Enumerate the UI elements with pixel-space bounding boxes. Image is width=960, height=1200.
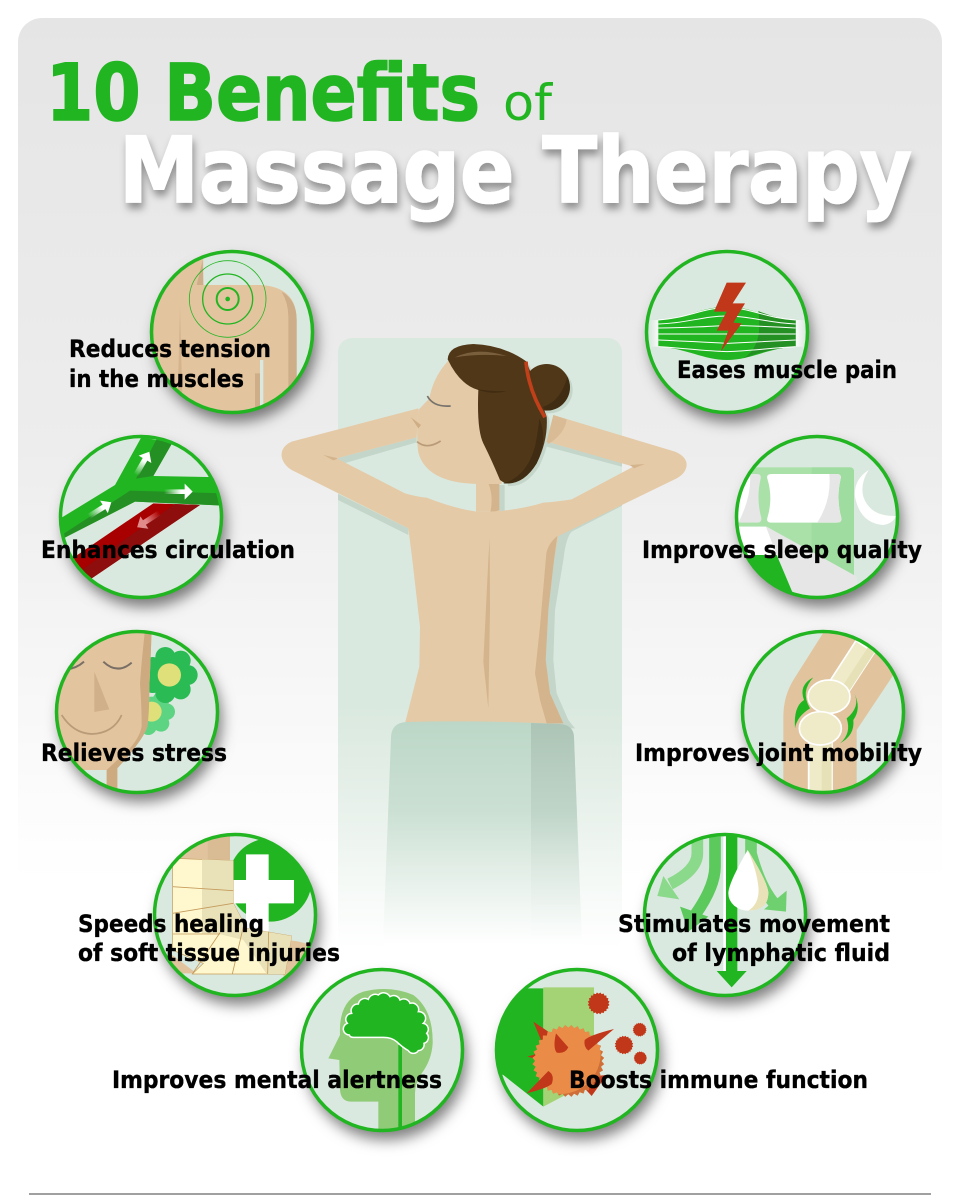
- ring: [736, 436, 898, 598]
- circle base: [151, 251, 313, 413]
- ring: [154, 834, 316, 996]
- background card: [18, 18, 942, 880]
- label: Speeds healing: [78, 910, 264, 938]
- benefit: stimulates lymphatic fluid: [618, 833, 890, 996]
- circle base: [60, 436, 222, 598]
- icon: head with brain: [328, 989, 433, 1133]
- benefit: boosts immune function: [490, 969, 868, 1131]
- label: of lymphatic fluid: [672, 939, 890, 967]
- circle base: [646, 251, 808, 413]
- icon: knee joint: [783, 630, 893, 797]
- figure: woman lying on mat: [282, 344, 687, 945]
- footer rule: [29, 1193, 931, 1195]
- label: Eases muscle pain: [677, 356, 897, 384]
- benefit: improves mental alertness: [112, 969, 463, 1133]
- icon: shoulder with target rings: [153, 258, 297, 411]
- title: [46, 49, 912, 224]
- massage mat: [338, 338, 622, 950]
- figure shadows on mat: [330, 364, 637, 728]
- back shading: [535, 536, 563, 723]
- body and arms: [282, 408, 687, 723]
- icon: shield and viruses: [490, 987, 647, 1107]
- title line one: 10 Benefits: [46, 49, 480, 139]
- label: [69, 335, 271, 393]
- label: Reduces tension: [69, 335, 271, 363]
- label: [78, 910, 340, 967]
- label: Stimulates movement: [618, 910, 890, 938]
- circle base: [742, 631, 904, 793]
- icon: muscle with lightning bolt: [650, 283, 806, 360]
- icon: bandage and medical cross: [170, 833, 317, 977]
- benefit: improves joint mobility: [635, 630, 922, 797]
- ring: [60, 436, 222, 598]
- ring: [56, 632, 218, 792]
- face: [411, 361, 502, 484]
- circle base: [301, 969, 463, 1131]
- label: [618, 910, 890, 967]
- label: in the muscles: [69, 365, 244, 393]
- ring: [644, 834, 806, 996]
- circle base: [56, 631, 218, 793]
- icon: relaxed face with flowers: [58, 633, 198, 788]
- icon: fluid drop and flow arrows: [657, 833, 787, 987]
- label: Boosts immune function: [569, 1066, 868, 1094]
- benefit: relieves stress: [41, 627, 227, 797]
- benefit: improves sleep quality: [642, 436, 922, 602]
- ring: [496, 970, 658, 1130]
- circle base: [644, 834, 806, 996]
- ring: [646, 252, 808, 412]
- towel: [383, 721, 582, 945]
- label: Improves sleep quality: [642, 536, 922, 564]
- benefit: reduces tension: [69, 250, 313, 417]
- circle base: [154, 834, 316, 996]
- ring: [152, 252, 312, 412]
- label: Enhances circulation: [41, 536, 295, 564]
- hair: [448, 344, 570, 483]
- benefit: enhances circulation: [41, 436, 295, 598]
- benefit: speeds healing: [78, 833, 340, 996]
- ring: [742, 632, 904, 792]
- icon: blood vessels: [57, 437, 223, 578]
- label: of soft tissue injuries: [78, 939, 340, 967]
- label: Improves joint mobility: [635, 739, 922, 767]
- benefit: eases muscle pain: [646, 251, 897, 413]
- label: Improves mental alertness: [112, 1066, 442, 1094]
- title word of: of: [503, 74, 553, 132]
- icon: bed and moon: [730, 467, 896, 602]
- label: Relieves stress: [41, 739, 227, 767]
- circle base: [496, 969, 658, 1131]
- ring: [302, 970, 462, 1130]
- circle base: [736, 436, 898, 598]
